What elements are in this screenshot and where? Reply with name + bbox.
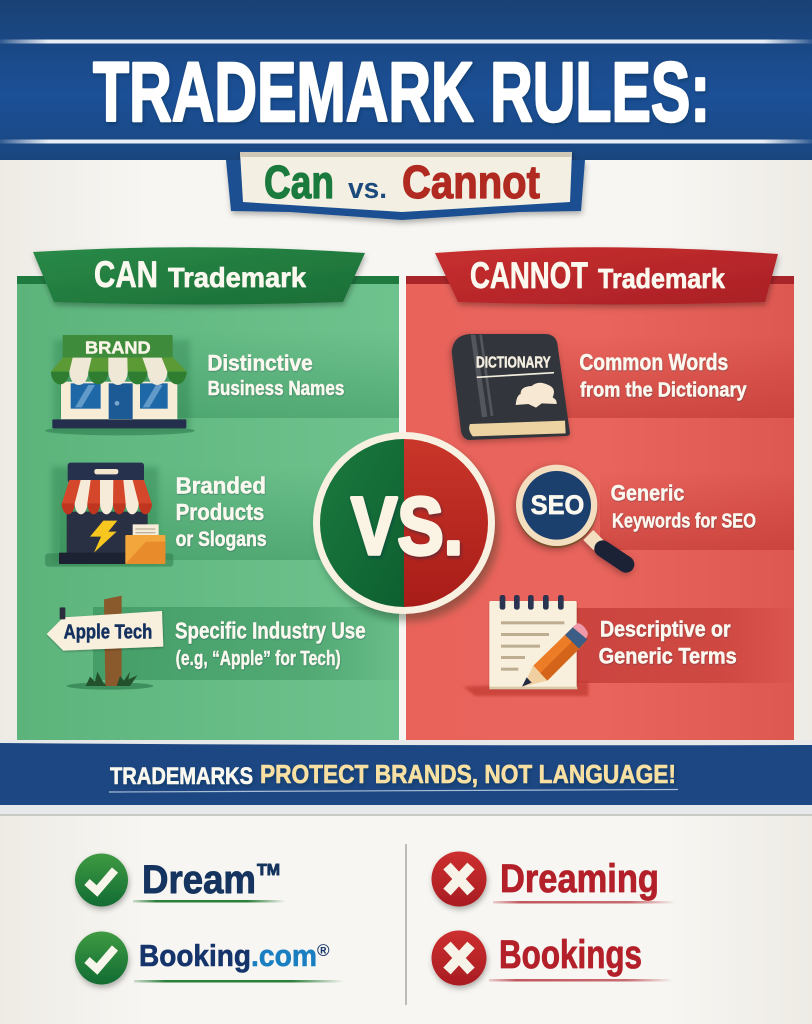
icon: check bbox=[75, 932, 128, 984]
subtitle ribbon bbox=[226, 150, 585, 220]
underline: dreaming bbox=[493, 901, 676, 904]
booking.com text: .com bbox=[251, 938, 317, 973]
item text: branded products or slogans: Branded bbox=[176, 472, 266, 498]
item text: generic keywords: Keywords for SEO bbox=[612, 510, 756, 532]
vs text: VS. bbox=[351, 481, 463, 572]
heading: can trademark: CAN bbox=[94, 254, 158, 295]
slogan yellow text: PROTECT BRANDS, NOT LANGUAGE! bbox=[260, 759, 676, 789]
header banner bbox=[0, 0, 812, 160]
divider bbox=[405, 844, 407, 1005]
item text: branded products or slogans: Products bbox=[176, 499, 264, 525]
panel: cannot trademark bbox=[406, 276, 794, 740]
example: dream bbox=[75, 854, 280, 906]
item text: descriptive or generic terms bbox=[599, 617, 737, 668]
item text: distinctive business names: Distinctive bbox=[207, 351, 313, 376]
heading: cannot trademark: Trademark bbox=[598, 263, 725, 294]
example: booking.com bbox=[75, 932, 330, 984]
item text: descriptive or generic terms: Descriptive or bbox=[600, 617, 731, 642]
right column items bbox=[452, 334, 756, 696]
item text: distinctive business names bbox=[207, 351, 344, 400]
underline: bookings bbox=[489, 979, 673, 982]
item text: generic keywords bbox=[611, 481, 756, 532]
heading banner: can bbox=[33, 247, 365, 304]
dream text: Dream bbox=[142, 858, 256, 902]
subtitle text: Can bbox=[264, 156, 334, 208]
item text: common words: Common Words bbox=[579, 349, 728, 375]
dreaming text: Dreaming bbox=[500, 857, 659, 901]
booking.com text: ® bbox=[317, 941, 330, 960]
icon: dictionary book bbox=[452, 334, 570, 440]
heading: cannot trademark: CANNOT bbox=[470, 255, 588, 296]
icon: apple tech signpost: Apple Tech bbox=[64, 621, 152, 643]
icon: apple tech signpost bbox=[47, 596, 163, 690]
booking.com text: Booking bbox=[139, 938, 251, 973]
underline: dream bbox=[133, 900, 286, 902]
icon: magnifying glass seo bbox=[516, 465, 626, 564]
item text: generic keywords: Generic bbox=[611, 481, 684, 506]
icon: cross bbox=[432, 852, 486, 906]
item text: common words bbox=[579, 349, 747, 402]
dream text: TM bbox=[257, 862, 280, 879]
panel: can trademark bbox=[17, 276, 399, 740]
icon: shop with bolt and folder bbox=[45, 463, 173, 567]
item text: specific industry use: Specific Industry Use bbox=[175, 617, 366, 643]
item text: specific industry use bbox=[175, 617, 366, 670]
item text: distinctive business names: Business Names bbox=[208, 378, 344, 400]
left column items bbox=[45, 335, 366, 690]
vs badge bbox=[313, 432, 499, 621]
icon: cross bbox=[432, 930, 486, 986]
slogan banner bbox=[0, 740, 812, 816]
example: dreaming bbox=[432, 852, 659, 906]
underline: booking.com bbox=[134, 980, 344, 982]
subtitle vs: vs. bbox=[348, 173, 387, 205]
icon: storefront: BRAND bbox=[85, 337, 151, 357]
bookings text: Bookings bbox=[499, 933, 642, 977]
slogan white text: TRADEMARKS bbox=[110, 763, 253, 790]
icon: notepad and pencil bbox=[463, 595, 588, 696]
item text: specific industry use: (e.g, “Apple” for Tech) bbox=[176, 648, 341, 670]
icon: storefront bbox=[45, 335, 195, 435]
item text: descriptive or generic terms: Generic Terms bbox=[599, 643, 737, 668]
heading: can trademark: Trademark bbox=[168, 262, 306, 293]
heading banner: cannot bbox=[435, 247, 778, 304]
icon: magnifying glass seo: SEO bbox=[531, 490, 584, 520]
icon: dictionary book: DICTIONARY bbox=[476, 354, 551, 371]
example: bookings bbox=[432, 930, 642, 986]
subtitle cannot: Cannot bbox=[402, 156, 540, 208]
item text: branded products or slogans bbox=[176, 472, 267, 551]
item text: common words: from the Dictionary bbox=[580, 379, 747, 402]
item text: branded products or slogans: or Slogans bbox=[176, 527, 267, 551]
icon: check bbox=[75, 854, 128, 906]
